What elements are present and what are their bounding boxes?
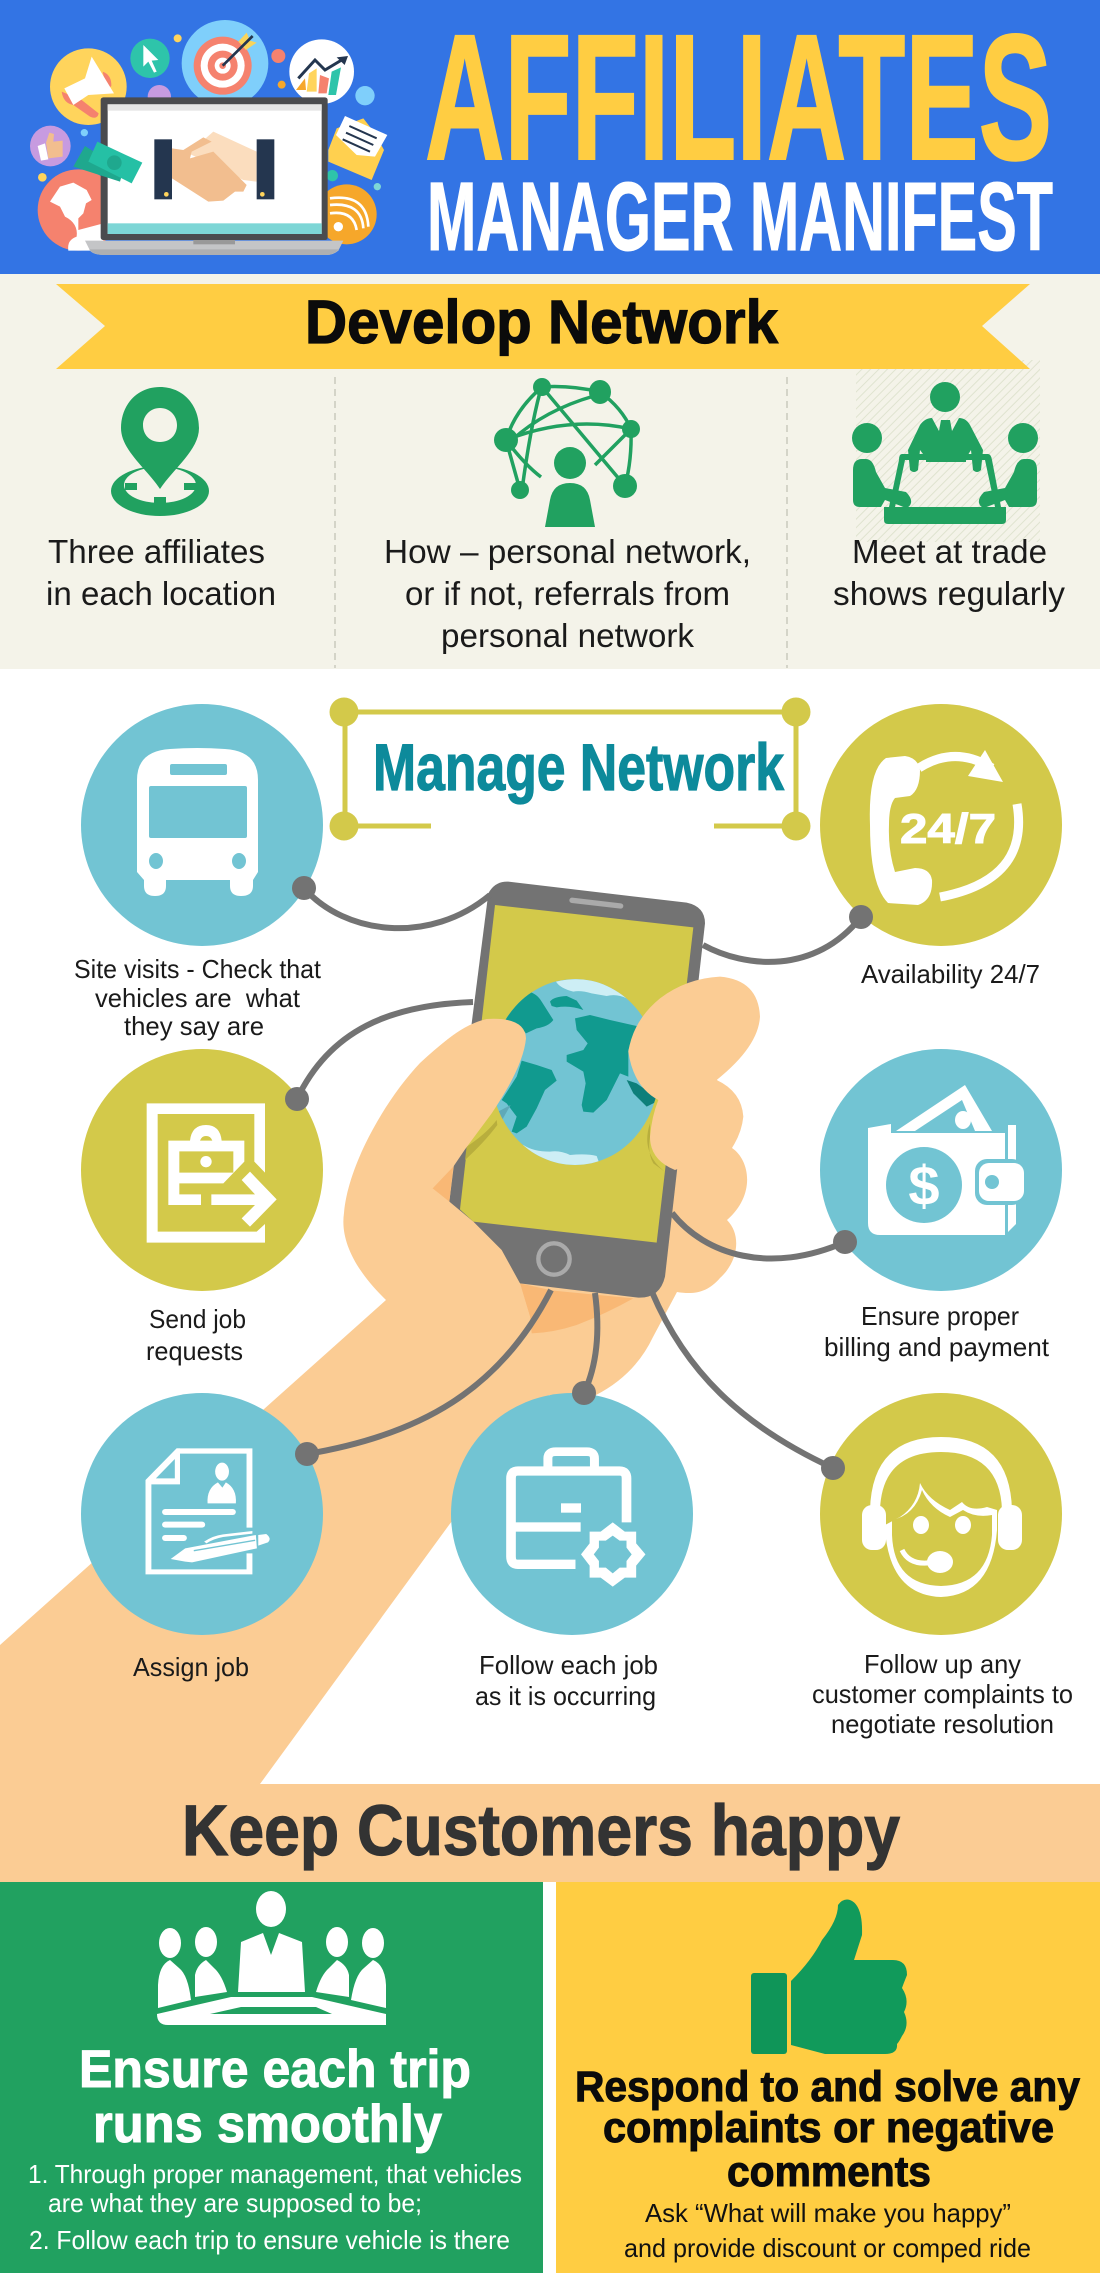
label: billing: billing and payment	[824, 1332, 1050, 1362]
icon: chart circle	[289, 39, 354, 104]
icon: thumbs up	[751, 1900, 907, 2054]
icon: briefcase gear	[451, 1393, 693, 1635]
label: availability: Availability 24/7	[861, 959, 1040, 989]
label: follow up complaints: Follow up any	[864, 1649, 1021, 1679]
label: send job requests	[146, 1304, 246, 1366]
heading: ensure each trip: Ensure each trip	[79, 2040, 471, 2099]
panel: header	[0, 0, 1100, 274]
icon: envelope	[328, 116, 387, 180]
icon: customer support headset	[820, 1393, 1062, 1635]
text: steps list: 1. Through proper management, that vehicles	[28, 2159, 522, 2189]
label: billing	[824, 1301, 1050, 1362]
connector lines	[297, 888, 861, 1468]
banner: develop network	[56, 284, 1030, 369]
hand and arm (back)	[0, 1025, 747, 1784]
text: three affiliates: in each location	[46, 575, 276, 612]
hand: fingers	[628, 977, 760, 1170]
text: steps list	[28, 2159, 522, 2255]
icon: laptop	[85, 97, 343, 255]
text: meet at trade shows	[833, 533, 1066, 612]
label: follow each job	[475, 1650, 658, 1711]
heading: keep customers happy: Keep Customers happy	[182, 1792, 900, 1871]
heading: manage network: Manage Network	[373, 730, 784, 804]
icon: boardroom	[157, 1891, 386, 2025]
icon: person circle	[38, 169, 119, 251]
icon: megaphone circle	[50, 48, 127, 125]
shadows on screen	[465, 1120, 666, 1173]
phone	[449, 882, 705, 1298]
label: assign job: Assign job	[133, 1652, 249, 1682]
text: how personal network	[384, 533, 751, 654]
label: follow up complaints: customer complaints to	[812, 1679, 1073, 1709]
text: three affiliates	[46, 533, 276, 612]
panel: ensure each trip	[0, 1882, 543, 2273]
text: steps list: are what they are supposed to be;	[48, 2188, 422, 2218]
label: follow up complaints	[812, 1649, 1073, 1739]
icon: rss circle	[317, 184, 377, 244]
heading: ensure each trip	[79, 2040, 471, 2154]
globe	[491, 979, 660, 1166]
text: ask what will make you happy: Ask “What will make you happy”	[645, 2198, 1011, 2228]
text: how personal network: personal network	[441, 617, 694, 654]
heading: respond: Respond to and solve any	[575, 2063, 1080, 2111]
heading: respond: comments	[727, 2148, 931, 2196]
title	[425, 0, 1053, 271]
shadow under phone	[520, 1283, 633, 1333]
text: ask what will make you happy: and provide discount or comped ride	[624, 2233, 1031, 2263]
phone and hand front	[417, 882, 760, 1341]
icon: network person	[494, 378, 640, 527]
icon: cursor circle	[130, 39, 170, 78]
heading: respond	[575, 2063, 1080, 2196]
text: how personal network: How – personal network,	[384, 533, 751, 570]
icon: meeting table	[852, 382, 1038, 524]
label: follow up complaints: negotiate resolution	[831, 1709, 1054, 1739]
icon: wallet	[820, 1049, 1062, 1291]
label: send job requests: Send job	[149, 1304, 246, 1334]
connector dots	[285, 876, 873, 1480]
panel: manage network	[0, 698, 1073, 1784]
text: meet at trade shows: shows regularly	[833, 575, 1066, 612]
panel: respond to complaints	[556, 1882, 1100, 2273]
heading: keep customers happy	[0, 1784, 1100, 1882]
label: site visits: they say are	[124, 1011, 264, 1041]
text: three affiliates: Three affiliates	[48, 533, 265, 570]
banner: develop network: Develop Network	[305, 288, 778, 356]
icon: target circle	[182, 20, 268, 107]
icon: bus	[81, 704, 323, 946]
text: meet at trade shows: Meet at trade	[852, 533, 1047, 570]
heading: manage network	[330, 698, 810, 840]
label: follow each job: Follow each job	[479, 1650, 658, 1680]
text: ask what will make you happy	[624, 2198, 1031, 2263]
text: how personal network: or if not, referrals from	[405, 575, 730, 612]
label: billing: Ensure proper	[861, 1301, 1019, 1331]
hand: thumb and palm	[417, 1019, 532, 1341]
illustration: laptop with handshake and marketing icons	[30, 20, 387, 255]
icon: handshake	[154, 132, 274, 202]
panel: develop network	[0, 274, 1100, 669]
icon: location pin	[111, 387, 209, 516]
heading: ensure each trip: runs smoothly	[93, 2095, 442, 2154]
label: send job requests: requests	[146, 1336, 243, 1366]
label: follow each job: as it is occurring	[475, 1681, 656, 1711]
icon: phone 24/7	[820, 704, 1062, 946]
icon: phone 24/7: 24/7	[900, 805, 996, 852]
icon: thumbs-up circle	[30, 126, 71, 166]
icon: job request document	[81, 1049, 323, 1291]
heading: respond: complaints or negative	[603, 2104, 1054, 2152]
label: site visits: Site visits - Check that	[74, 954, 322, 984]
icon: money	[73, 142, 142, 183]
label: site visits: vehicles are what	[95, 983, 301, 1013]
label: site visits	[74, 954, 322, 1041]
text: steps list: 2. Follow each trip to ensure vehicle is there	[29, 2225, 510, 2255]
icon: resume	[81, 1393, 323, 1635]
icon: wallet: $	[908, 1154, 940, 1217]
